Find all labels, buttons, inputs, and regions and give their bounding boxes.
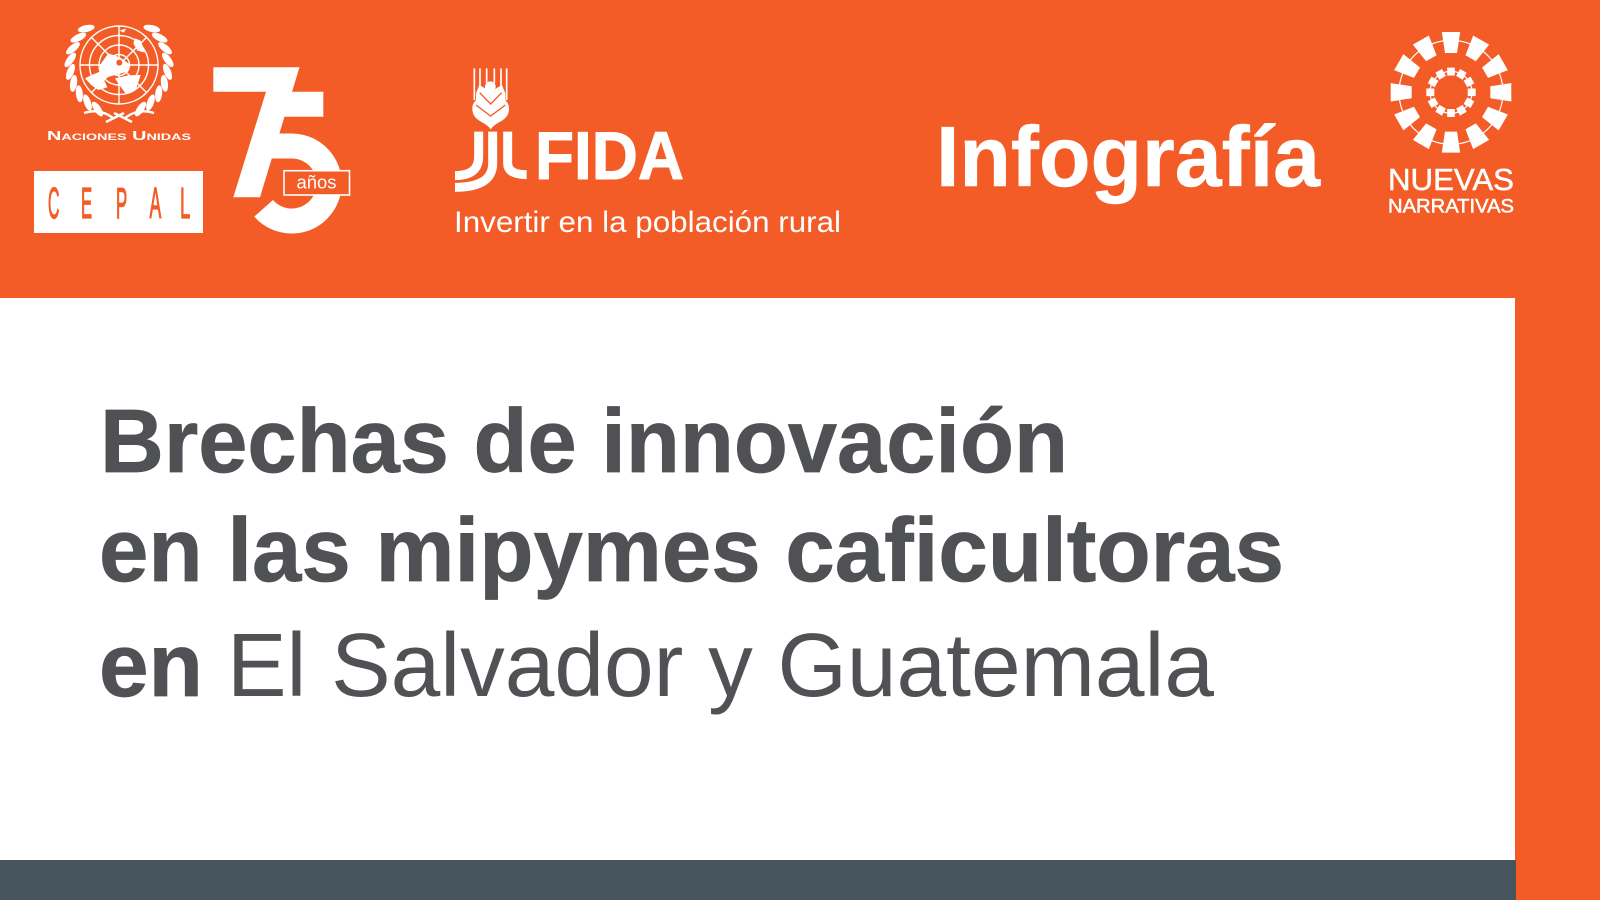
- logo: FIDA: FIDA: [535, 118, 684, 194]
- panel: white title panel: [0, 298, 1515, 861]
- logo: CEPAL: A: [150, 180, 162, 229]
- icon: wheat: [472, 68, 509, 129]
- logo: CEPAL: [34, 171, 203, 233]
- title: en las mipymes caficultoras: [99, 501, 1284, 601]
- logo: FIDA: [455, 68, 684, 194]
- label: Naciones Unidas: Naciones Unidas: [47, 129, 191, 143]
- title: en: [99, 616, 203, 716]
- logo: CEPAL: P: [116, 180, 127, 229]
- logo: 75 años: años: [296, 172, 337, 193]
- title: [99, 392, 1284, 716]
- title: El Salvador y Guatemala: [227, 616, 1215, 716]
- logo: 75 años: [213, 67, 350, 221]
- footer bar: [0, 860, 1516, 900]
- heading: Infografía: Infografía: [936, 110, 1321, 205]
- logo: CEPAL: L: [180, 179, 190, 228]
- title: Brechas de innovación: [100, 392, 1068, 492]
- logo: CEPAL: E: [81, 180, 92, 229]
- logo: Nuevas Narrativas: NUEVAS: [1388, 162, 1514, 197]
- logo: Nuevas Narrativas: [1388, 32, 1514, 218]
- logo: Nuevas Narrativas: NARRATIVAS: [1388, 197, 1514, 218]
- tagline: Invertir en la población rural: [454, 206, 841, 239]
- logo: CEPAL: C: [48, 179, 59, 229]
- logo: Naciones Unidas emblem: [62, 23, 176, 122]
